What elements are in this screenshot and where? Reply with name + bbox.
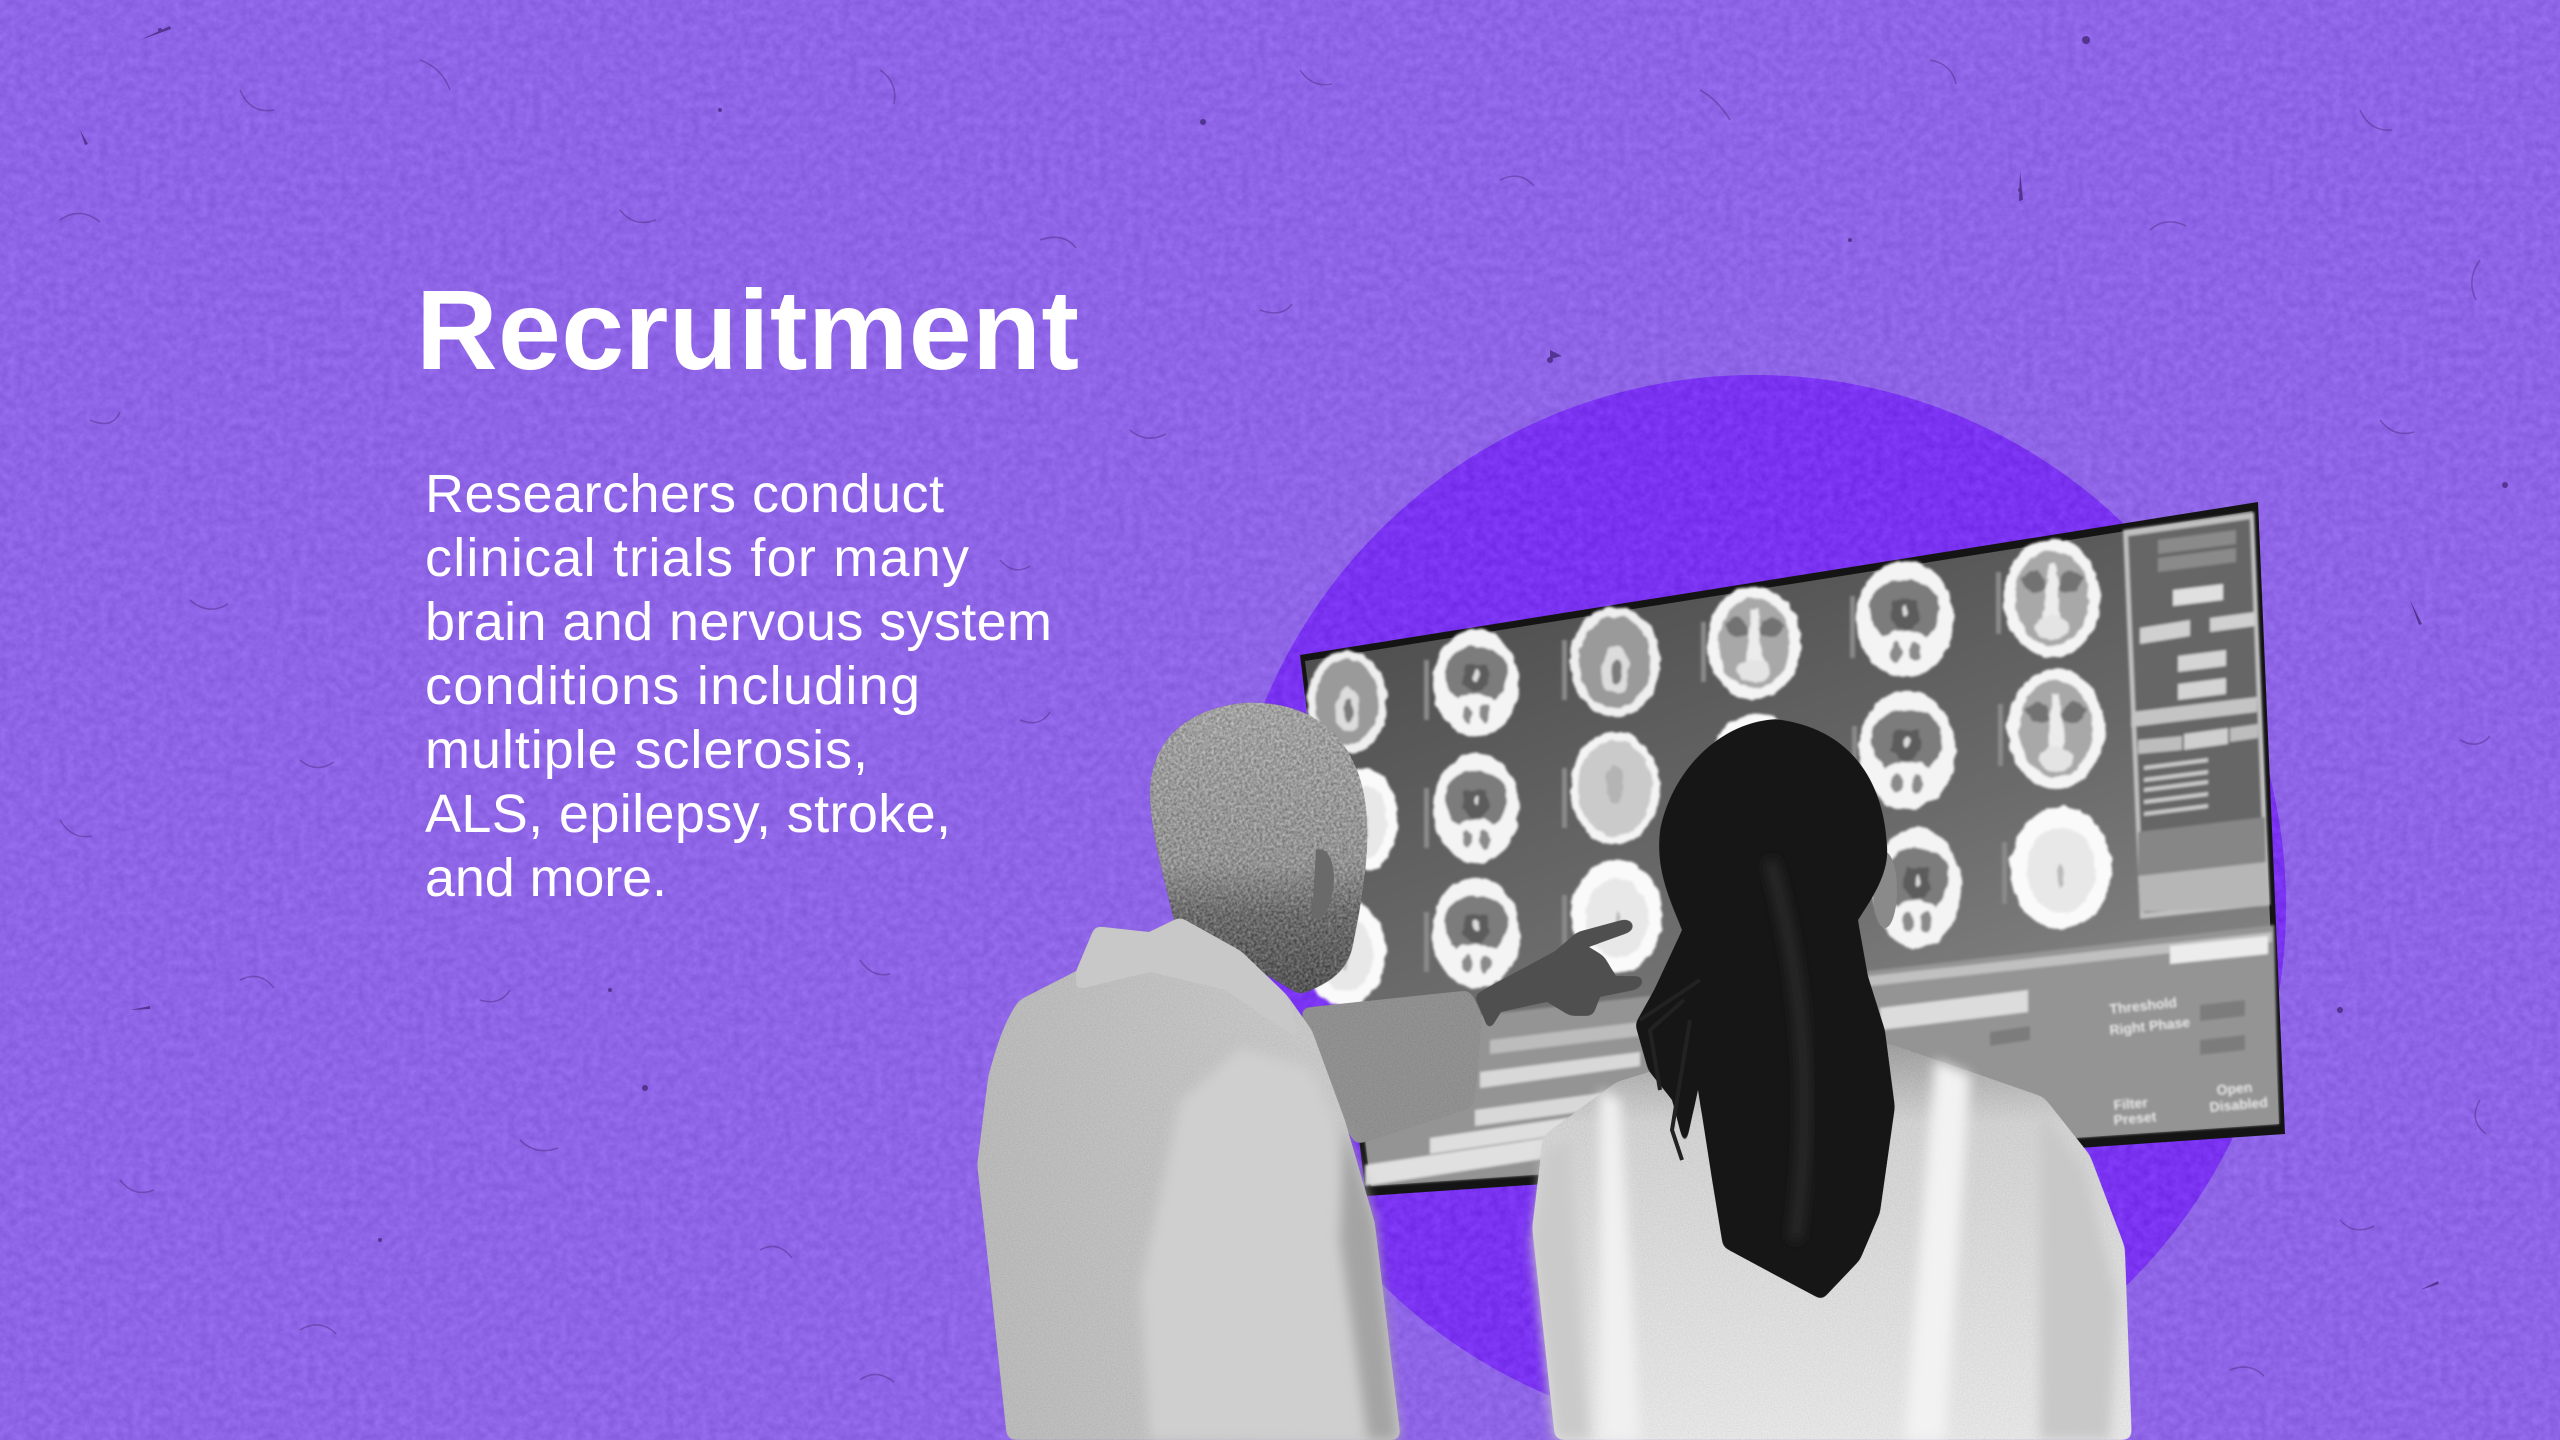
woman: cheek [1873,852,1897,928]
on-screen labels: Disabled [2209,1094,2268,1115]
body text: multiple sclerosis, [425,720,868,780]
body text: Researchers conduct [425,464,944,524]
man: ear [1312,849,1334,919]
monitor screen [1305,511,2279,1186]
body text: conditions including [425,656,920,716]
man: head and hair [1150,703,1367,995]
woman: dark hair and ponytail [1635,719,1895,1300]
on-screen labels: Filter [2113,1094,2149,1113]
man: raised arm sleeve [1300,990,1482,1145]
man in lab coat [977,703,1643,1440]
woman: coat shading [1532,1060,2118,1440]
woman: loose hair strands [1640,980,1700,1160]
body text [425,464,1052,908]
scan scale bars [1424,572,2007,972]
woman in lab coat [1532,719,2132,1440]
settings side panel [2123,512,2270,919]
scan grid [1304,539,2112,1006]
body text: brain and nervous system [425,592,1052,652]
body text: clinical trials for many [425,528,969,588]
on-screen labels: Right Phase [2109,1014,2191,1038]
man: collar [1076,917,1300,1040]
body text: ALS, epilepsy, stroke, [425,784,951,844]
body text: and more. [425,848,667,908]
woman: lab coat [1532,1044,2132,1440]
on-screen labels [2109,994,2268,1128]
on-screen labels: Open [2216,1079,2253,1098]
monitor with brain scans [1300,502,2285,1196]
man: coat seam shading [1340,1125,1398,1440]
man: pointing hand [1474,919,1643,1032]
monitor frame [1300,502,2285,1196]
on-screen labels: Threshold [2109,994,2178,1017]
man: lab coat [977,917,1401,1440]
woman: hair highlight [1770,860,1804,1240]
lower control area [1350,925,2279,1186]
on-screen labels: Preset [2113,1108,2157,1128]
title: Recruitment [416,267,1079,393]
purple circle behind monitor [1224,375,2286,1437]
man: coat sleeve panel [1141,1048,1395,1440]
